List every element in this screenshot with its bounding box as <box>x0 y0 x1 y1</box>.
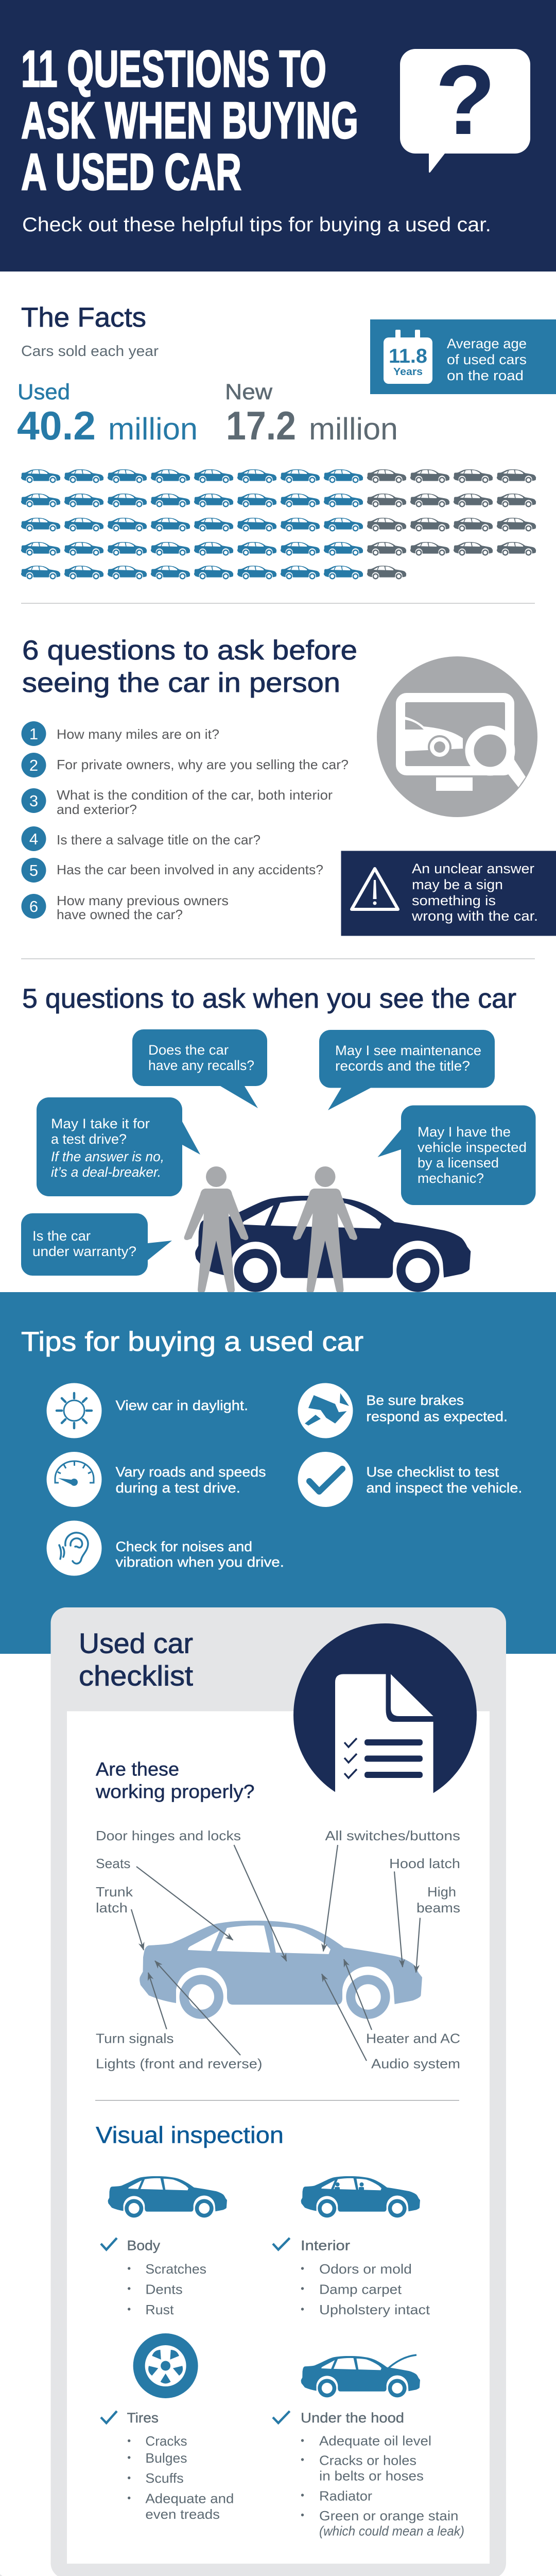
callout: unclear answer warning: may be a sign <box>412 877 503 892</box>
numbered list of questions: 4 <box>29 830 38 848</box>
panel: hero header <box>0 0 556 272</box>
subtitle: Check out these helpful tips for buying a used car. <box>22 214 491 236</box>
speech bubble: licensed mechanic: May I have the <box>418 1124 511 1140</box>
callout: average age: Average age <box>447 336 527 351</box>
tip: view in daylight <box>46 1383 248 1438</box>
callout: unclear answer warning: something is <box>412 893 496 908</box>
speech bubble: licensed mechanic <box>378 1106 535 1205</box>
heading: 5 questions: 5 questions to ask when you see the car <box>22 984 516 1014</box>
tip: brakes: respond as expected. <box>366 1409 508 1424</box>
icon: checklist document <box>293 1623 477 1811</box>
title: 11 QUESTIONS TO <box>21 40 326 98</box>
speech bubble: test drive <box>37 1097 200 1196</box>
part labels: Door hinges and locks <box>96 1828 241 1843</box>
icon: question speech bubble: ? <box>435 44 496 155</box>
inspection group: body: Rust <box>145 2302 174 2317</box>
stat: used cars: million <box>108 412 198 446</box>
part labels: High <box>427 1884 456 1900</box>
part labels: latch <box>96 1900 128 1916</box>
icon: monitor with car and magnifier <box>377 656 537 817</box>
inspection group: body: Scratches <box>145 2261 206 2277</box>
illustration: person left <box>184 1166 248 1293</box>
panel: 5 questions when you see the car <box>21 984 535 1293</box>
tip: use checklist <box>298 1452 522 1507</box>
part labels: Lights (front and reverse) <box>96 2056 263 2071</box>
callout: unclear answer warning <box>341 851 556 936</box>
stat: used cars: Used <box>18 380 70 404</box>
inspection group: tires: Scuffs <box>145 2470 184 2486</box>
callout: average age <box>370 319 556 394</box>
tip: noises and vibration <box>46 1521 284 1575</box>
numbered list of questions: How many previous owners <box>57 893 229 908</box>
inspection group: under the hood <box>273 2355 464 2539</box>
inspection group: interior <box>273 2176 430 2317</box>
speech bubble: recalls: Does the car <box>148 1042 229 1058</box>
part labels <box>96 1828 460 2071</box>
part labels: All switches/buttons <box>325 1828 460 1843</box>
part labels: Hood latch <box>389 1856 460 1871</box>
callout: average age: on the road <box>447 368 524 383</box>
stat: new cars <box>225 380 398 448</box>
inspection group: tires: Adequate and <box>145 2490 234 2506</box>
inspection group: interior: Damp carpet <box>319 2281 402 2297</box>
heading: 6 questions: 6 questions to ask before <box>22 635 357 666</box>
inspection group: tires <box>101 2333 234 2522</box>
panel: the facts <box>17 302 556 580</box>
inspection group: under the hood: (which could mean a leak) <box>319 2523 464 2539</box>
part labels: Heater and AC <box>366 2031 460 2046</box>
numbered list of questions <box>22 721 349 922</box>
numbered list of questions: 6 <box>29 897 38 916</box>
inspection group: body <box>101 2176 227 2317</box>
heading: the facts: The Facts <box>21 302 146 333</box>
tip: brakes: Be sure brakes <box>366 1393 464 1408</box>
arrows to car parts <box>131 1845 420 2061</box>
panel: tips for buying a used car <box>0 1292 556 1654</box>
tip: noises and vibration: vibration when you drive. <box>115 1554 284 1570</box>
caption: cars sold: Cars sold each year <box>21 343 159 360</box>
stat: used cars <box>17 380 198 448</box>
heading: visual inspection: Visual inspection <box>96 2122 284 2148</box>
speech bubble: recalls <box>132 1029 267 1108</box>
stat: new cars: 17.2 <box>226 403 296 448</box>
tip: use checklist: Use checklist to test <box>366 1464 499 1480</box>
speech bubble: licensed mechanic: by a licensed <box>418 1155 499 1171</box>
heading: used car checklist: checklist <box>79 1660 193 1692</box>
heading: used car checklist: Used car <box>79 1627 193 1659</box>
speech bubble: maintenance records: records and the title? <box>335 1058 470 1074</box>
speech bubble: licensed mechanic: mechanic? <box>418 1171 484 1186</box>
tip: vary roads and speeds: during a test drive. <box>115 1480 240 1496</box>
inspection group: tires: Cracks <box>145 2433 187 2449</box>
callout: average age: of used cars <box>447 352 527 367</box>
tip: vary roads and speeds: Vary roads and speeds <box>115 1464 266 1480</box>
numbered list of questions: For private owners, why are you selling the car? <box>57 757 349 772</box>
numbered list of questions: and exterior? <box>57 802 137 817</box>
speech bubble: warranty <box>21 1213 172 1276</box>
heading: used car checklist <box>79 1627 193 1692</box>
subheading: are these working properly <box>95 1759 254 1802</box>
speech bubble: test drive: May I take it for <box>51 1116 150 1131</box>
illustration: winding road <box>0 2575 556 2576</box>
inspection group: body: Body <box>127 2238 161 2253</box>
tip: view in daylight: View car in daylight. <box>115 1398 248 1413</box>
tip: use checklist: and inspect the vehicle. <box>366 1480 522 1496</box>
numbered list of questions: 5 <box>29 861 38 879</box>
speech bubble: recalls: have any recalls? <box>148 1058 254 1073</box>
callout: average age: Years <box>393 366 423 378</box>
illustration: person right <box>293 1166 357 1293</box>
speech bubble: warranty: under warranty? <box>32 1244 136 1259</box>
speech bubble: licensed mechanic: vehicle inspected <box>418 1140 527 1155</box>
speech bubble: maintenance records <box>319 1030 495 1110</box>
stat: new cars: New <box>225 380 273 404</box>
speech bubble: test drive: it’s a deal-breaker. <box>51 1164 161 1180</box>
inspection group: tires: Bulges <box>145 2450 187 2466</box>
inspection group: under the hood: Under the hood <box>301 2410 404 2426</box>
numbered list of questions: Has the car been involved in any accidents? <box>57 862 323 877</box>
inspection group: interior: Odors or mold <box>319 2261 412 2277</box>
inspection group: under the hood: Adequate oil level <box>319 2433 431 2448</box>
tip: noises and vibration: Check for noises and <box>115 1539 252 1554</box>
heading: 6 questions <box>22 635 357 698</box>
inspection group: under the hood: in belts or hoses <box>319 2468 424 2483</box>
numbered list of questions: How many miles are on it? <box>57 726 219 742</box>
numbered list of questions: Is there a salvage title on the car? <box>57 832 260 848</box>
callout: unclear answer warning: An unclear answer <box>412 861 534 876</box>
tip: brakes <box>298 1383 508 1438</box>
numbered list of questions: 2 <box>29 756 38 774</box>
tip: vary roads and speeds <box>46 1452 266 1507</box>
speech bubble: test drive: a test drive? <box>51 1131 127 1147</box>
part labels: Audio system <box>371 2056 460 2071</box>
panel: 6 questions before seeing the car <box>22 635 556 936</box>
part labels: beams <box>416 1900 460 1916</box>
subheading: are these working properly: working properly? <box>95 1781 254 1802</box>
heading: tips: Tips for buying a used car <box>21 1327 363 1357</box>
subheading: are these working properly: Are these <box>96 1759 179 1780</box>
inspection group: tires: Tires <box>127 2410 159 2426</box>
inspection group: tires: even treads <box>145 2506 220 2522</box>
numbered list of questions: 1 <box>29 725 38 743</box>
title: A USED CAR <box>21 143 241 201</box>
inspection group: body: Dents <box>145 2281 183 2297</box>
numbered list of questions: 3 <box>29 792 38 810</box>
chart: pictogram of cars sold <box>21 469 536 580</box>
speech bubble: warranty: Is the car <box>32 1228 91 1244</box>
diagram: car with callout labels <box>96 1828 460 2071</box>
speech bubble: maintenance records: May I see maintenance <box>335 1043 481 1058</box>
heading: 6 questions: seeing the car in person <box>22 668 340 698</box>
stat: used cars: 40.2 <box>17 403 96 448</box>
inspection group: under the hood: Green or orange stain <box>319 2508 458 2523</box>
inspection group: interior: Interior <box>301 2238 350 2253</box>
title <box>21 40 358 201</box>
panel: used car checklist <box>50 1607 506 2576</box>
illustration: navy car <box>195 1196 471 1292</box>
part labels: Turn signals <box>96 2031 174 2046</box>
inspection group: interior: Upholstery intact <box>319 2302 430 2317</box>
numbered list of questions: have owned the car? <box>57 907 183 922</box>
part labels: Trunk <box>96 1884 133 1900</box>
part labels: Seats <box>96 1856 131 1871</box>
icon: question speech bubble <box>400 44 530 173</box>
callout: average age: 11.8 <box>389 345 427 367</box>
inspection group: under the hood: Cracks or holes <box>319 2452 416 2468</box>
speech bubble: test drive: If the answer is no, <box>51 1149 164 1164</box>
numbered list of questions: What is the condition of the car, both interior <box>57 787 333 803</box>
callout: unclear answer warning: wrong with the car. <box>411 908 538 924</box>
inspection group: under the hood: Radiator <box>319 2488 372 2504</box>
stat: new cars: million <box>309 412 398 446</box>
title: ASK WHEN BUYING <box>21 92 358 149</box>
